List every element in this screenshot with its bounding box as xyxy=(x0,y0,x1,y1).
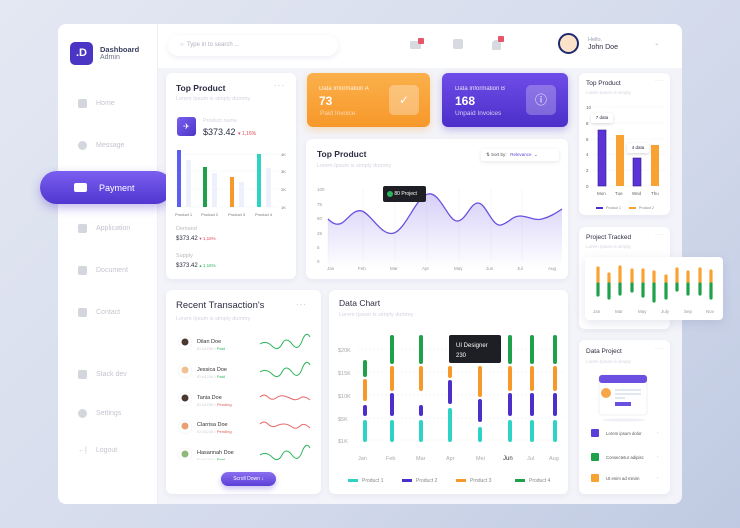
panel: data project xyxy=(579,340,670,494)
panel: right top product: 0 xyxy=(586,184,589,189)
panel: data chart: Aug xyxy=(549,456,559,462)
panel: top product left: Product 4 xyxy=(255,212,273,217)
list items: Consectetur adipisc xyxy=(606,455,644,460)
chart: project tracked popout xyxy=(585,257,723,320)
panel: right top product: 10 xyxy=(586,105,592,110)
panel: top product line chart: Lorem Ipsum is simply dummy xyxy=(317,163,391,169)
list items: › xyxy=(657,454,658,459)
nav: message: Message xyxy=(96,142,124,149)
panel: data chart: Jul xyxy=(527,456,534,462)
nav: message xyxy=(78,141,124,150)
panel: data chart: $10K xyxy=(338,394,351,400)
nav: stack dev xyxy=(78,370,127,379)
tooltip: 80 project: 80 Project xyxy=(394,191,417,197)
panel: right top product xyxy=(579,73,670,215)
nav: logout xyxy=(78,446,118,454)
panel: recent transactions: Dilan Doe xyxy=(197,339,221,345)
chart: project tracked popout: Nov xyxy=(706,309,715,314)
panel: top product left: Product 1 xyxy=(175,212,193,217)
panel: data chart: Product 1 xyxy=(362,478,384,484)
panel: data information A: Paid Invoice xyxy=(320,110,355,117)
panel: right top product: 6 xyxy=(586,137,589,142)
chart: project tracked popout: July xyxy=(661,309,670,314)
nav: application: Application xyxy=(96,225,130,232)
panel: top product left: $373.42 ▾ 1,16% xyxy=(176,236,216,242)
panel: data information A: ✓ xyxy=(399,93,409,107)
tooltip: UI designer: UI Designer xyxy=(456,343,488,349)
panel: right top product: Product 2 xyxy=(639,206,654,210)
panel: data chart xyxy=(329,290,568,494)
panel: top product left: 3K xyxy=(281,169,286,174)
panel: top product left: ✈ xyxy=(183,122,190,131)
nav: settings xyxy=(78,409,121,418)
panel: recent transactions: Clarrisa Doe xyxy=(197,422,228,428)
panel: top product left: ··· xyxy=(274,81,285,90)
panel: data information A xyxy=(307,73,430,127)
panel: data chart: $5K xyxy=(338,417,348,423)
chart: project tracked popout: Jan xyxy=(593,309,601,314)
user profile xyxy=(558,33,660,54)
user profile: John Doe xyxy=(588,44,618,51)
logo: .D xyxy=(76,47,87,59)
panel: recent transactions: ID #1234 • Pending xyxy=(197,402,232,407)
panel: right top product: ··· xyxy=(655,78,664,84)
tooltip: 80 project xyxy=(383,186,426,202)
panel: right top product: Top Product xyxy=(586,80,621,87)
logo xyxy=(70,42,139,65)
panel: top product line chart: Mar xyxy=(390,266,398,271)
panel: data chart: Lorem Ipsum is simply dummy xyxy=(339,312,413,318)
chart: project tracked popout: May xyxy=(638,309,647,314)
panel: data project: Data Project xyxy=(586,348,622,355)
panel: data chart: $20K xyxy=(338,348,351,354)
logo: Admin xyxy=(100,54,120,61)
panel: data information A: Data Information A xyxy=(319,86,369,92)
tooltip: UI designer xyxy=(449,335,501,363)
panel: top product left: Top Product xyxy=(176,83,225,93)
panel: recent transactions: Jessica Doe xyxy=(197,367,227,373)
panel: right top product: Lorem Ipsum is simply xyxy=(586,90,631,95)
tooltip: 4 data: 4 data xyxy=(632,145,644,150)
panel: top product left: 4K xyxy=(281,152,286,157)
panel: right top product: Thu xyxy=(651,191,659,196)
panel: top product line chart xyxy=(306,139,568,279)
list items: › xyxy=(657,430,658,435)
panel: recent transactions: Lorem Ipsum is simply dummy xyxy=(176,316,250,322)
nav: document: Document xyxy=(96,267,128,274)
panel: top product line chart: Top Product xyxy=(317,149,366,159)
panel: data chart: Feb xyxy=(386,456,395,462)
panel: data chart: Jan xyxy=(358,456,367,462)
panel: data information A: 73 xyxy=(319,94,332,108)
panel: top product line chart: Jul xyxy=(517,266,523,271)
panel: right top product: Mon xyxy=(597,191,606,196)
tooltip: UI designer: 230 xyxy=(456,353,466,359)
nav: application xyxy=(78,224,130,233)
panel: top product line chart: 5 xyxy=(317,245,320,250)
nav: payment active pill: Payment xyxy=(99,182,135,192)
nav: home: Home xyxy=(96,100,115,107)
tooltip: 7 data xyxy=(591,113,613,123)
panel: project tracked: ··· xyxy=(655,232,664,238)
nav: contact: Contact xyxy=(96,309,120,316)
list items: Lorem ipsum dolor xyxy=(606,431,642,436)
panel: right top product: 2 xyxy=(586,168,589,173)
list items xyxy=(591,429,658,482)
panel: top product line chart: Feb xyxy=(358,266,366,271)
nav: payment active pill xyxy=(40,171,172,204)
panel: top product left: Product name xyxy=(203,118,237,124)
chart: project tracked popout: Mar xyxy=(615,309,623,314)
panel: data chart: Mei xyxy=(476,456,485,462)
panel: right top product: Tue xyxy=(615,191,623,196)
panel: top product line chart: Aug xyxy=(548,266,557,271)
panel: recent transactions: ID #1234 • Pending xyxy=(197,429,232,434)
tooltip: 7 data: 7 data xyxy=(596,115,608,120)
user profile: ⌄ xyxy=(654,40,660,47)
panel: recent transactions xyxy=(166,290,321,494)
panel: right top product: 4 xyxy=(586,152,589,157)
panel: data chart: Mar xyxy=(416,456,426,462)
panel: top product left: Product 3 xyxy=(228,212,246,217)
panel: top product left: Lorem Ipsum is simply dummy xyxy=(176,96,250,102)
panel: right top product: 8 xyxy=(586,121,589,126)
panel: right top product: Product 1 xyxy=(606,206,621,210)
panel: data information B: Unpaid Invoices xyxy=(455,110,501,117)
search box: ○ Type in to search ... xyxy=(180,42,239,48)
nav: home xyxy=(78,99,115,108)
panel: data chart: $15K xyxy=(338,371,351,377)
panel: data chart: Product 4 xyxy=(529,478,551,484)
illustration xyxy=(598,374,648,422)
list items: › xyxy=(657,475,658,480)
sidebar xyxy=(58,24,158,504)
panel: top product line chart: Apr xyxy=(422,266,430,271)
header xyxy=(158,24,682,68)
panel: data chart: Apr xyxy=(446,456,455,462)
nav: logout: ←| xyxy=(78,447,87,454)
panel: top product left: Supply xyxy=(176,253,193,259)
button: scroll down xyxy=(221,472,276,486)
panel: top product left xyxy=(166,73,296,279)
panel: top product line chart: 100 xyxy=(317,187,325,192)
panel: recent transactions: ID #1234 • Paid xyxy=(197,346,225,351)
panel: top product left: $373.42 ▴ 1,16% xyxy=(176,263,216,269)
nav: document xyxy=(78,266,128,275)
panel: recent transactions: Hasannah Doe xyxy=(197,450,234,456)
nav: stack dev: Stack dev xyxy=(96,371,127,378)
panel: data information B xyxy=(442,73,568,127)
panel: data chart: Product 3 xyxy=(470,478,492,484)
header icons xyxy=(410,36,504,50)
search box xyxy=(168,35,338,56)
panel: top product line chart: 50 xyxy=(317,216,323,221)
nav: logout: Logout xyxy=(96,447,117,454)
logo: Dashboard xyxy=(100,45,139,54)
panel: data information B: ⓘ xyxy=(535,93,547,107)
user profile: Hello, xyxy=(588,37,602,43)
panel: recent transactions: Tania Doe xyxy=(197,395,222,401)
panel: top product left: 2K xyxy=(281,187,286,192)
panel: project tracked: Project Tracked xyxy=(586,234,631,241)
panel: top product left: Demand xyxy=(176,226,197,232)
nav: settings: Settings xyxy=(96,410,121,417)
chart: project tracked popout: Sep xyxy=(684,309,693,314)
panel: data project: ··· xyxy=(655,346,664,352)
panel: data chart: Jun xyxy=(503,456,513,462)
panel: top product line chart: May xyxy=(454,266,463,271)
panel: recent transactions: Recent Transaction's xyxy=(176,300,264,311)
panel: top product line chart: 25 xyxy=(317,231,323,236)
panel: top product left: 1K xyxy=(281,205,286,210)
nav: contact xyxy=(78,308,120,317)
panel: top product left: Product 2 xyxy=(201,212,219,217)
panel: recent transactions: ··· xyxy=(296,300,307,309)
panel: top product line chart: 0 xyxy=(317,259,320,264)
panel: recent transactions: ID #1234 • Paid xyxy=(197,374,225,379)
panel: top product line chart: ⇅ Sort by: Relevance ⌄ xyxy=(486,152,538,157)
panel: project tracked: Lorem Ipsum is simply xyxy=(586,244,631,249)
panel: top product left: $373.42 ▾ 1,16% xyxy=(203,127,256,137)
panel: data information B: Data Information B xyxy=(455,86,505,92)
panel: top product line chart: Jan xyxy=(327,266,335,271)
panel: data chart: Data Chart xyxy=(339,298,380,308)
panel: top product line chart: Jun xyxy=(486,266,494,271)
panel: data chart: $1K xyxy=(338,439,348,445)
panel: data chart: Product 2 xyxy=(416,478,438,484)
panel: top product line chart: 75 xyxy=(317,202,323,207)
list items: Ut enim ad minim xyxy=(606,476,639,481)
panel: project tracked xyxy=(579,227,670,329)
panel: data information B: 168 xyxy=(455,94,475,108)
tooltip: 4 data xyxy=(627,143,649,153)
button: scroll down: Scroll Down ↓ xyxy=(233,476,264,482)
panel: data project: Lorem Ipsum is simply xyxy=(586,359,631,364)
main dashboard frame xyxy=(58,24,682,504)
panel: right top product: Wed xyxy=(632,191,642,196)
